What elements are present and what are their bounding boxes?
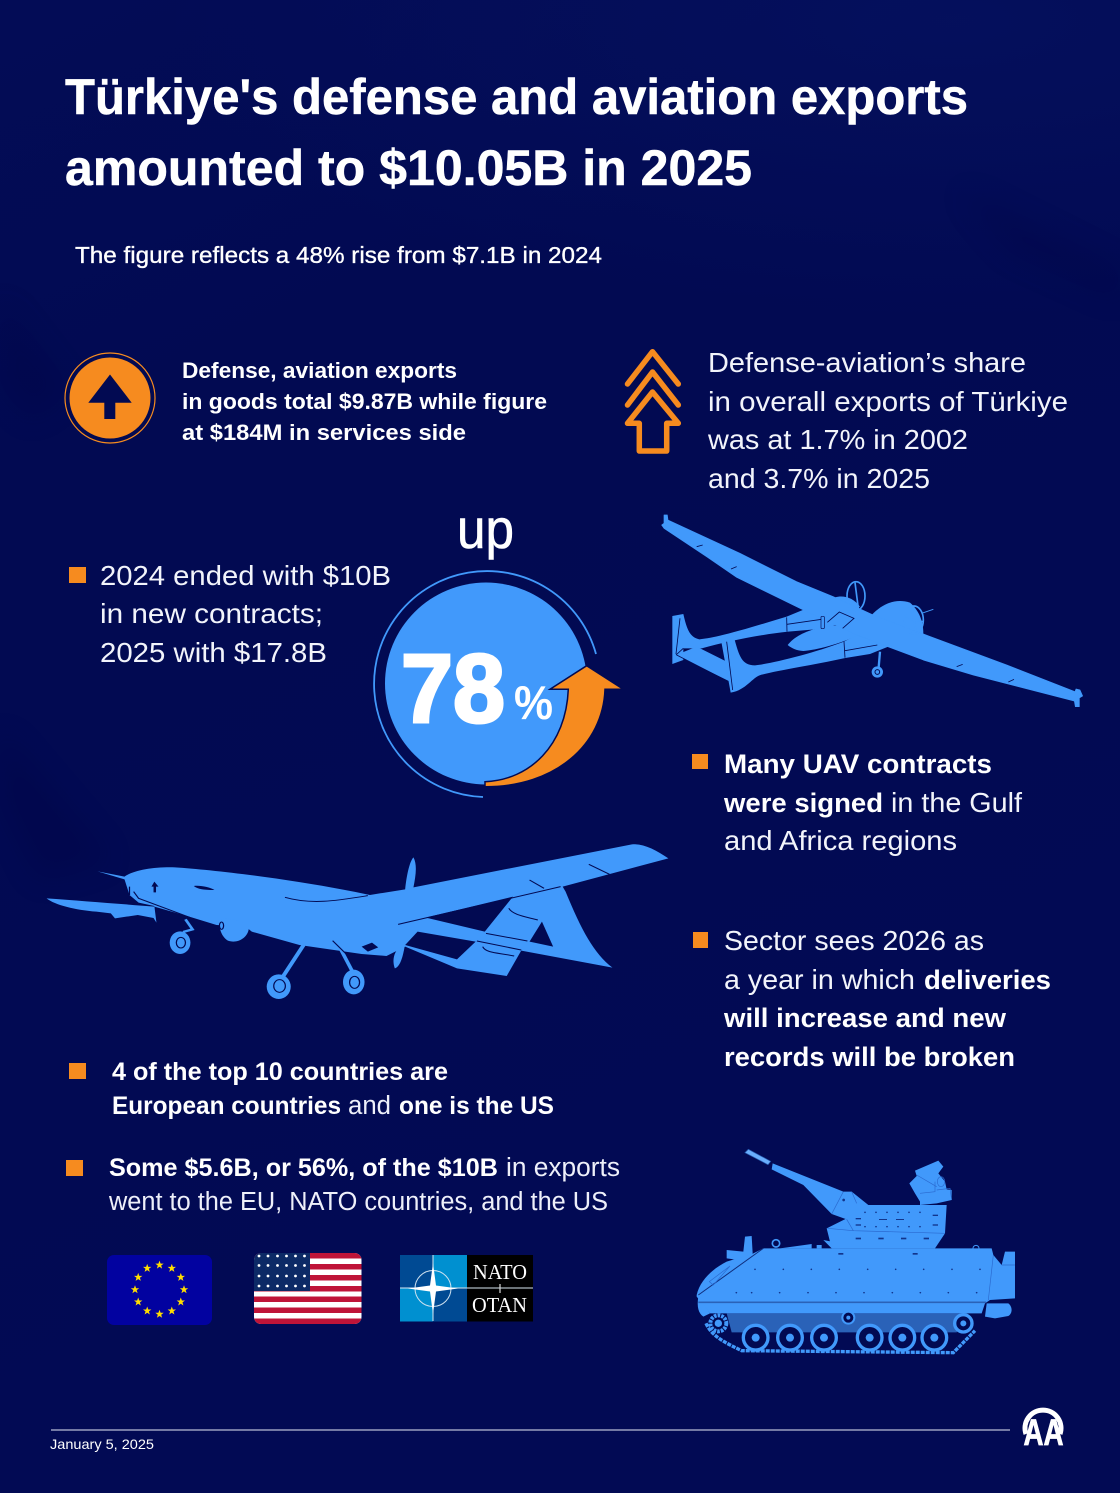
bullet: top 10 countries: and: [348, 1092, 391, 1120]
icon: NATO logo: NATO: [473, 1260, 527, 1284]
bullet: new contracts: 2024 ended with $10B: [100, 560, 391, 591]
icon: stacked chevrons arrow: [628, 352, 678, 451]
chart: 78 percent circle: 78: [401, 634, 505, 743]
bullet: EU, NATO and US share: Some $5.6B, or 56%, of the $10B: [109, 1154, 498, 1182]
bullet: EU, NATO and US share: [66, 1154, 620, 1216]
logo: Anadolu Agency: AA: [1024, 1412, 1064, 1453]
illustration: twin boom UAV: [662, 515, 1083, 707]
text block: share of overall exports: was at 1.7% in 2002: [707, 424, 968, 455]
bullet: deliveries in 2026: deliveries: [924, 965, 1051, 995]
text block: share of overall exports: and 3.7% in 2025: [708, 463, 930, 494]
chart: 78 percent circle: %: [514, 676, 553, 729]
bullet: new contracts: 2025 with $17.8B: [100, 637, 327, 668]
title: [65, 69, 968, 196]
bullet: deliveries in 2026: a year in which: [724, 964, 915, 995]
illustration: single tail UAV: [47, 844, 668, 999]
text block: share of overall exports: Defense-aviation’s share: [708, 347, 1026, 378]
bullet: new contracts: in new contracts;: [100, 598, 323, 629]
arrow: orange growth arrow: [485, 666, 623, 787]
text block: share of overall exports: in overall exports of Türkiye: [708, 386, 1068, 417]
label: up: up: [457, 497, 514, 560]
bullet: top 10 countries: [69, 1058, 554, 1120]
text block: goods and services: [182, 358, 547, 445]
bullet: UAV contracts: [692, 749, 1022, 856]
chart: 78 percent circle: [374, 571, 623, 797]
icon: NATO logo: OTAN: [472, 1293, 527, 1317]
icon: orange circle with up arrow: [65, 353, 155, 443]
title: Türkiye's defense and aviation exports: [65, 69, 968, 125]
bullet: deliveries in 2026: will increase and new: [723, 1003, 1007, 1033]
icon: EU flag: [107, 1255, 212, 1325]
bullet: UAV contracts: in the Gulf: [891, 787, 1022, 818]
bullet: top 10 countries: one is the US: [399, 1092, 554, 1120]
illustration: armoured vehicle: [697, 1149, 1015, 1353]
bullet: UAV contracts: were signed: [723, 788, 883, 818]
bullet: deliveries in 2026: Sector sees 2026 as: [724, 925, 984, 956]
text block: goods and services: Defense, aviation exports: [182, 358, 457, 383]
bullet: UAV contracts: Many UAV contracts: [724, 749, 992, 779]
text block: goods and services: at $184M in services side: [182, 420, 466, 445]
bullet: new contracts: [69, 560, 391, 668]
icon: US flag: [254, 1253, 362, 1324]
bullet: top 10 countries: European countries: [112, 1092, 341, 1120]
footer line and date: January 5, 2025: [50, 1436, 154, 1452]
icon: NATO logo: [400, 1255, 533, 1322]
title: amounted to $10.05B in 2025: [65, 140, 752, 196]
bullet: top 10 countries: 4 of the top 10 countries are: [112, 1058, 448, 1086]
bullet: UAV contracts: and Africa regions: [724, 825, 957, 856]
bullet: deliveries in 2026: [693, 925, 1051, 1072]
text block: share of overall exports: [707, 347, 1068, 494]
bullet: EU, NATO and US share: went to the EU, NATO countries, and the US: [108, 1188, 608, 1216]
bullet: deliveries in 2026: records will be broken: [724, 1042, 1015, 1072]
text block: goods and services: in goods total $9.87B while figure: [182, 389, 547, 414]
bullet: EU, NATO and US share: in exports: [506, 1154, 620, 1182]
subtitle: The figure reflects a 48% rise from $7.1B in 2024: [75, 242, 602, 268]
